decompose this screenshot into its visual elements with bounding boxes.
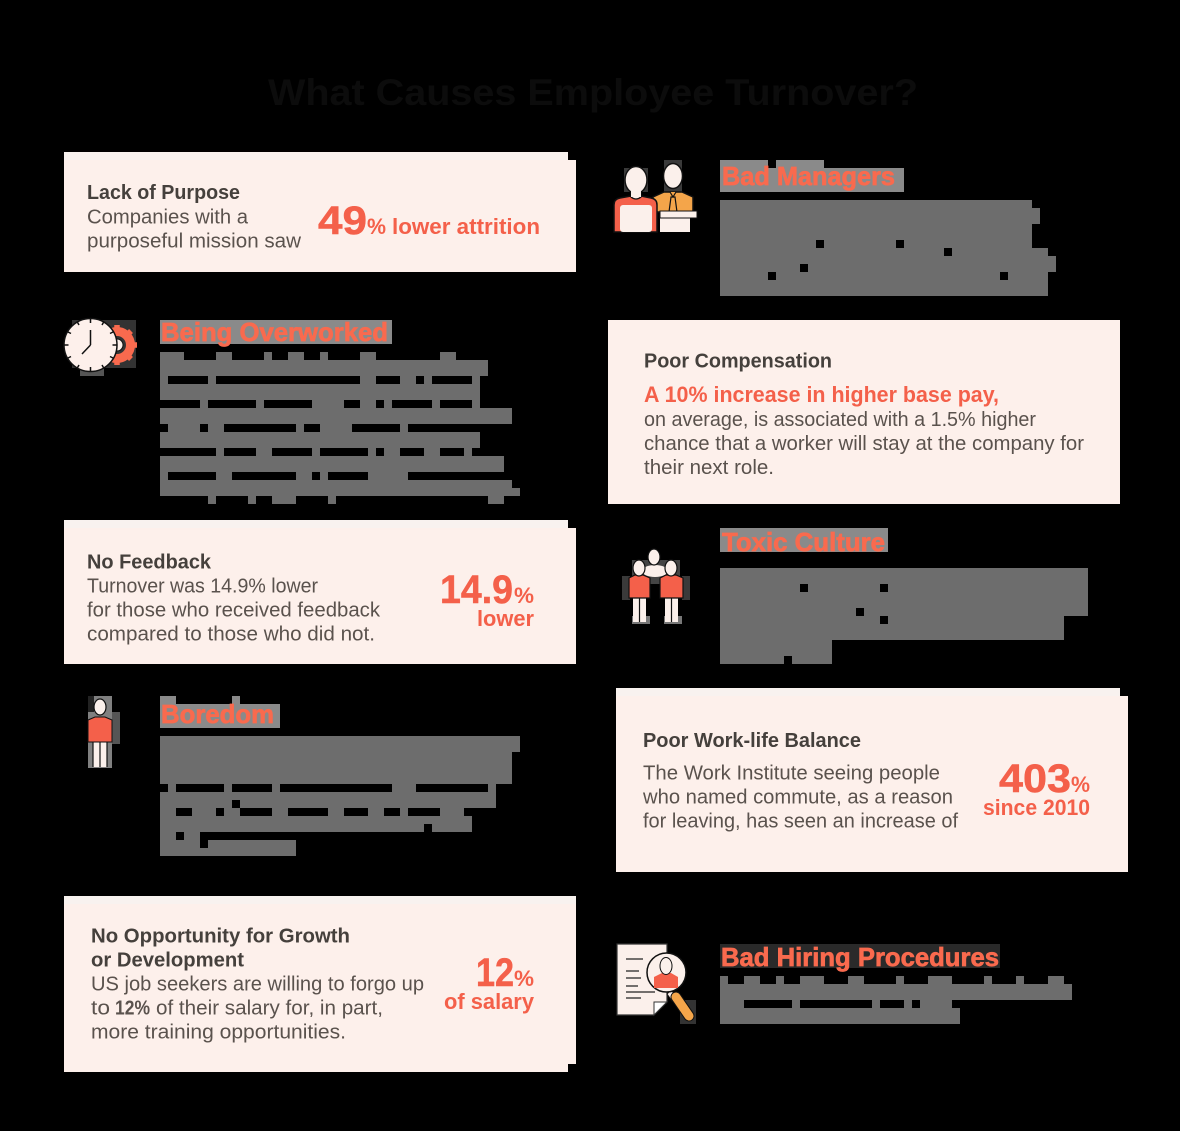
panel: no opportunity for growth: 12%	[115, 998, 150, 1020]
panel: poor compensation: A 10% increase in higher base pay,	[644, 382, 999, 407]
panel: lack of purpose: %	[367, 214, 386, 239]
panel: no opportunity for growth: or Development	[91, 950, 244, 972]
heading: being overworked: Being Overworked	[161, 317, 388, 347]
panel: no opportunity for growth: to	[91, 998, 110, 1020]
panel: poor work-life balance: The Work Institute seeing people	[643, 762, 940, 784]
panel: poor compensation: Poor Compensation	[644, 350, 832, 372]
panel: poor work-life balance: who named commute, as a reason	[642, 786, 953, 808]
heading: toxic culture: Toxic Culture	[722, 527, 885, 557]
panel: poor compensation	[608, 320, 1120, 504]
panel: poor work-life balance: %	[1071, 772, 1090, 797]
panel: poor compensation: on average, is associated with a 1.5% higher	[644, 409, 1036, 431]
text block: boredom (obscured)	[160, 736, 520, 856]
panel: poor compensation: chance that a worker will stay at the company for	[644, 433, 1084, 455]
panel: no opportunity for growth: of their salary for, in part,	[156, 998, 383, 1020]
heading: bad managers: Bad Managers	[722, 161, 895, 191]
panel: poor work-life balance: Poor Work-life Balance	[643, 730, 861, 752]
heading: boredom: Boredom	[161, 699, 274, 729]
panel: no feedback: No Feedback	[87, 552, 212, 574]
panel: no opportunity for growth: %	[514, 966, 534, 991]
panel: poor work-life balance	[616, 688, 1128, 872]
panel: no opportunity for growth: No Opportunity for Growth	[91, 926, 350, 948]
panel: no feedback	[64, 520, 576, 664]
panel: no feedback: Turnover was 14.9% lower	[87, 576, 318, 598]
text block: being overworked (obscured)	[160, 352, 520, 504]
icon: bad hiring procedures	[617, 944, 696, 1024]
text block: toxic culture (obscured)	[720, 568, 1088, 664]
panel: no opportunity for growth: 12	[476, 951, 514, 995]
icon: being overworked	[64, 318, 137, 376]
panel: no opportunity for growth: US job seekers are willing to forgo up	[91, 974, 424, 996]
title: What Causes Employee Turnover?	[268, 72, 918, 113]
icon: bad managers	[614, 160, 697, 232]
text block: bad managers (obscured)	[720, 200, 1056, 296]
icon: boredom	[88, 696, 120, 768]
panel: no feedback: %	[514, 583, 534, 608]
panel: lack of purpose	[64, 152, 576, 272]
panel: lack of purpose: lower attrition	[392, 214, 540, 239]
panel: poor compensation: their next role.	[644, 457, 774, 479]
panel: poor work-life balance: 403	[999, 757, 1071, 801]
icon: toxic culture	[622, 549, 690, 624]
panel: poor work-life balance: since 2010	[983, 795, 1090, 820]
text block: bad hiring procedures (obscured)	[720, 976, 1072, 1024]
panel: no feedback: for those who received feedback	[87, 600, 381, 622]
panel: no opportunity for growth: of salary	[444, 989, 535, 1014]
panel: no opportunity for growth: more training opportunities.	[91, 1022, 346, 1044]
panel: no feedback: compared to those who did not.	[87, 624, 375, 646]
panel: lack of purpose: 49	[318, 199, 367, 243]
panel: no feedback: lower	[477, 606, 534, 631]
heading: bad hiring procedures: Bad Hiring Procedures	[721, 942, 999, 972]
panel: poor work-life balance: for leaving, has seen an increase of	[643, 810, 958, 832]
panel: no opportunity for growth	[64, 896, 576, 1072]
panel: no feedback: 14.9	[440, 568, 513, 612]
panel: lack of purpose: Lack of Purpose	[87, 182, 240, 204]
panel: lack of purpose: purposeful mission saw	[87, 230, 302, 252]
panel: lack of purpose: Companies with a	[87, 206, 249, 228]
